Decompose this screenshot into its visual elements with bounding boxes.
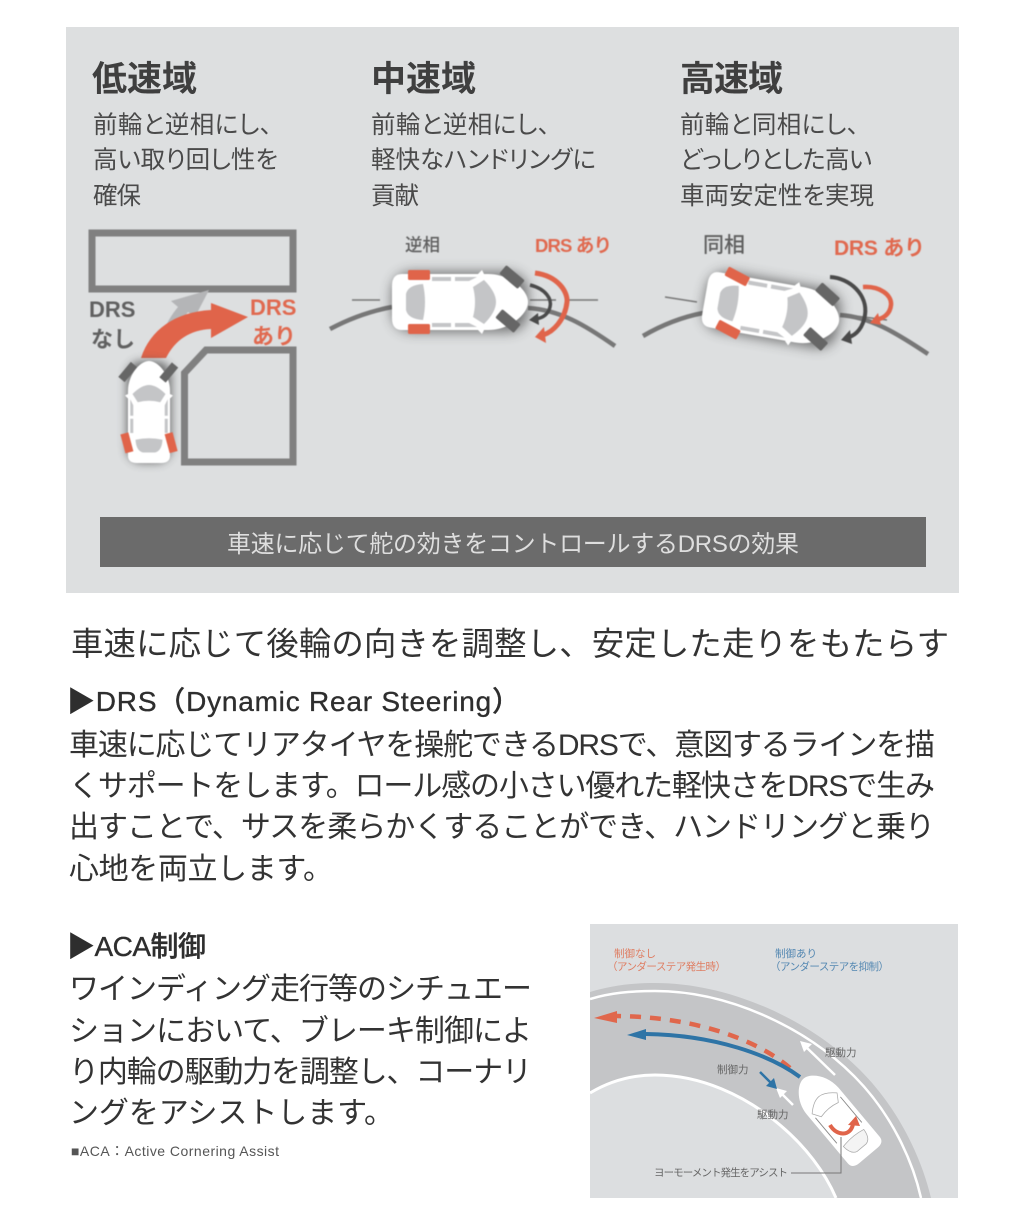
car: mid speed: [392, 265, 528, 334]
heading: ACA: ▶ACA制御: [67, 931, 206, 962]
arrow: steering dark: [529, 285, 550, 325]
diagram: high speed same phase: [643, 234, 928, 357]
text: low speed description: [93, 111, 278, 210]
label: DRS on: DRS あり: [535, 235, 612, 256]
text: ACA body: ングをアシストします。: [69, 1097, 394, 1130]
label: DRS on: DRS: [250, 295, 296, 320]
diagram: low speed corner: [89, 233, 296, 463]
text: low speed description: 確保: [93, 182, 142, 210]
car: low speed: [118, 361, 178, 463]
arrow: control force: [760, 1072, 777, 1089]
label: yaw moment: ヨーモーメント発生をアシスト: [654, 1166, 788, 1179]
label: no control: [607, 947, 726, 973]
banner: 車速に応じて舵の効きをコントロールするDRSの効果: [227, 531, 799, 558]
car: ACA: [788, 1065, 884, 1169]
text: ACA body: ションにおいて、ブレーキ制御によ: [69, 1015, 532, 1048]
text: ACA body: ワインディング走行等のシチュエー: [69, 973, 532, 1006]
text: ACA body: り内輪の駆動力を調整し、コーナリ: [69, 1056, 532, 1089]
label: with control: 制御あり: [775, 947, 817, 960]
arrow: yaw moment: [830, 1116, 860, 1134]
arrow: outer drive force: [800, 1041, 835, 1075]
label: outer drive force: 駆動力: [825, 1046, 856, 1059]
panel: DRS speed ranges: [66, 27, 959, 593]
heading: low speed: 低速域: [92, 60, 197, 99]
section: DRS: [67, 686, 935, 886]
panel: ACA diagram: [590, 924, 958, 1198]
road: [590, 983, 931, 1198]
text: ACA body: [69, 973, 532, 1130]
section: ACA: [67, 931, 532, 1159]
text: DRS body: 車速に応じてリアタイヤを操舵できるDRSで、意図するラインを描: [69, 729, 935, 762]
label: DRS on: あり: [252, 324, 296, 349]
arrow: with control: [627, 1029, 800, 1077]
text: high speed description: 車両安定性を実現: [680, 182, 874, 210]
text: high speed description: 前輪と同相にし、: [680, 111, 859, 139]
label: DRS none: DRS: [89, 297, 135, 322]
label: no control: （アンダーステア発生時）: [607, 960, 726, 973]
text: low speed description: 高い取り回し性を: [93, 146, 278, 174]
label: inner drive force: 駆動力: [757, 1108, 788, 1121]
label: no control: 制御なし: [614, 947, 656, 960]
label: DRS on: DRS あり: [834, 237, 925, 260]
text: low speed description: 前輪と逆相にし、: [93, 111, 272, 139]
road lines: [643, 297, 928, 354]
text: mid speed description: 前輪と逆相にし、: [371, 111, 550, 139]
label: same phase: 同相: [703, 234, 745, 257]
text: DRS body: くサポートをします。ロール感の小さい優れた軽快さをDRSで生み: [69, 770, 935, 803]
heading: high speed: 高速域: [680, 60, 783, 99]
arrow: steering dark: [830, 277, 865, 344]
arrow: steering orange: [863, 287, 891, 325]
label: with control: [770, 947, 889, 973]
leader line: [791, 1137, 841, 1173]
heading: mid speed: 中速域: [371, 60, 476, 99]
label: DRS none: [89, 297, 135, 352]
banner: [100, 517, 926, 567]
arrow: without DRS: [160, 290, 209, 345]
text: mid speed description: 軽快なハンドリングに: [371, 146, 596, 174]
car: high speed: [699, 263, 845, 357]
text: DRS body: 心地を両立します。: [69, 853, 333, 886]
label: DRS on: [250, 295, 296, 349]
text: high speed description: [680, 111, 874, 210]
text: mid speed description: 貢献: [371, 182, 419, 210]
label: with control: （アンダーステアを抑制）: [770, 960, 889, 973]
label: control force: 制御力: [717, 1063, 748, 1076]
label: DRS none: なし: [91, 327, 135, 352]
subtitle: 車速に応じて後輪の向きを調整し、安定した走りをもたらす: [71, 626, 949, 662]
road lines: [330, 300, 615, 346]
footnote: ■ACA：Active Cornering Assist: [71, 1143, 279, 1159]
arrow: with DRS: [141, 303, 248, 358]
label: opposite phase: 逆相: [405, 235, 440, 255]
road walls: [92, 233, 293, 462]
text: high speed description: どっしりとした高い: [680, 146, 872, 174]
text: DRS body: [69, 729, 935, 886]
arrow: steering orange: [535, 273, 567, 343]
arrow: inner drive force: [776, 1088, 793, 1105]
diagram: mid speed opposite phase: [330, 235, 615, 346]
arrow: without control: [594, 1011, 790, 1068]
text: DRS body: 出すことで、サスを柔らかくすることができ、ハンドリングと乗り: [69, 811, 935, 844]
heading: DRS: ▶DRS（Dynamic Rear Steering）: [67, 686, 520, 717]
text: mid speed description: [371, 111, 596, 210]
